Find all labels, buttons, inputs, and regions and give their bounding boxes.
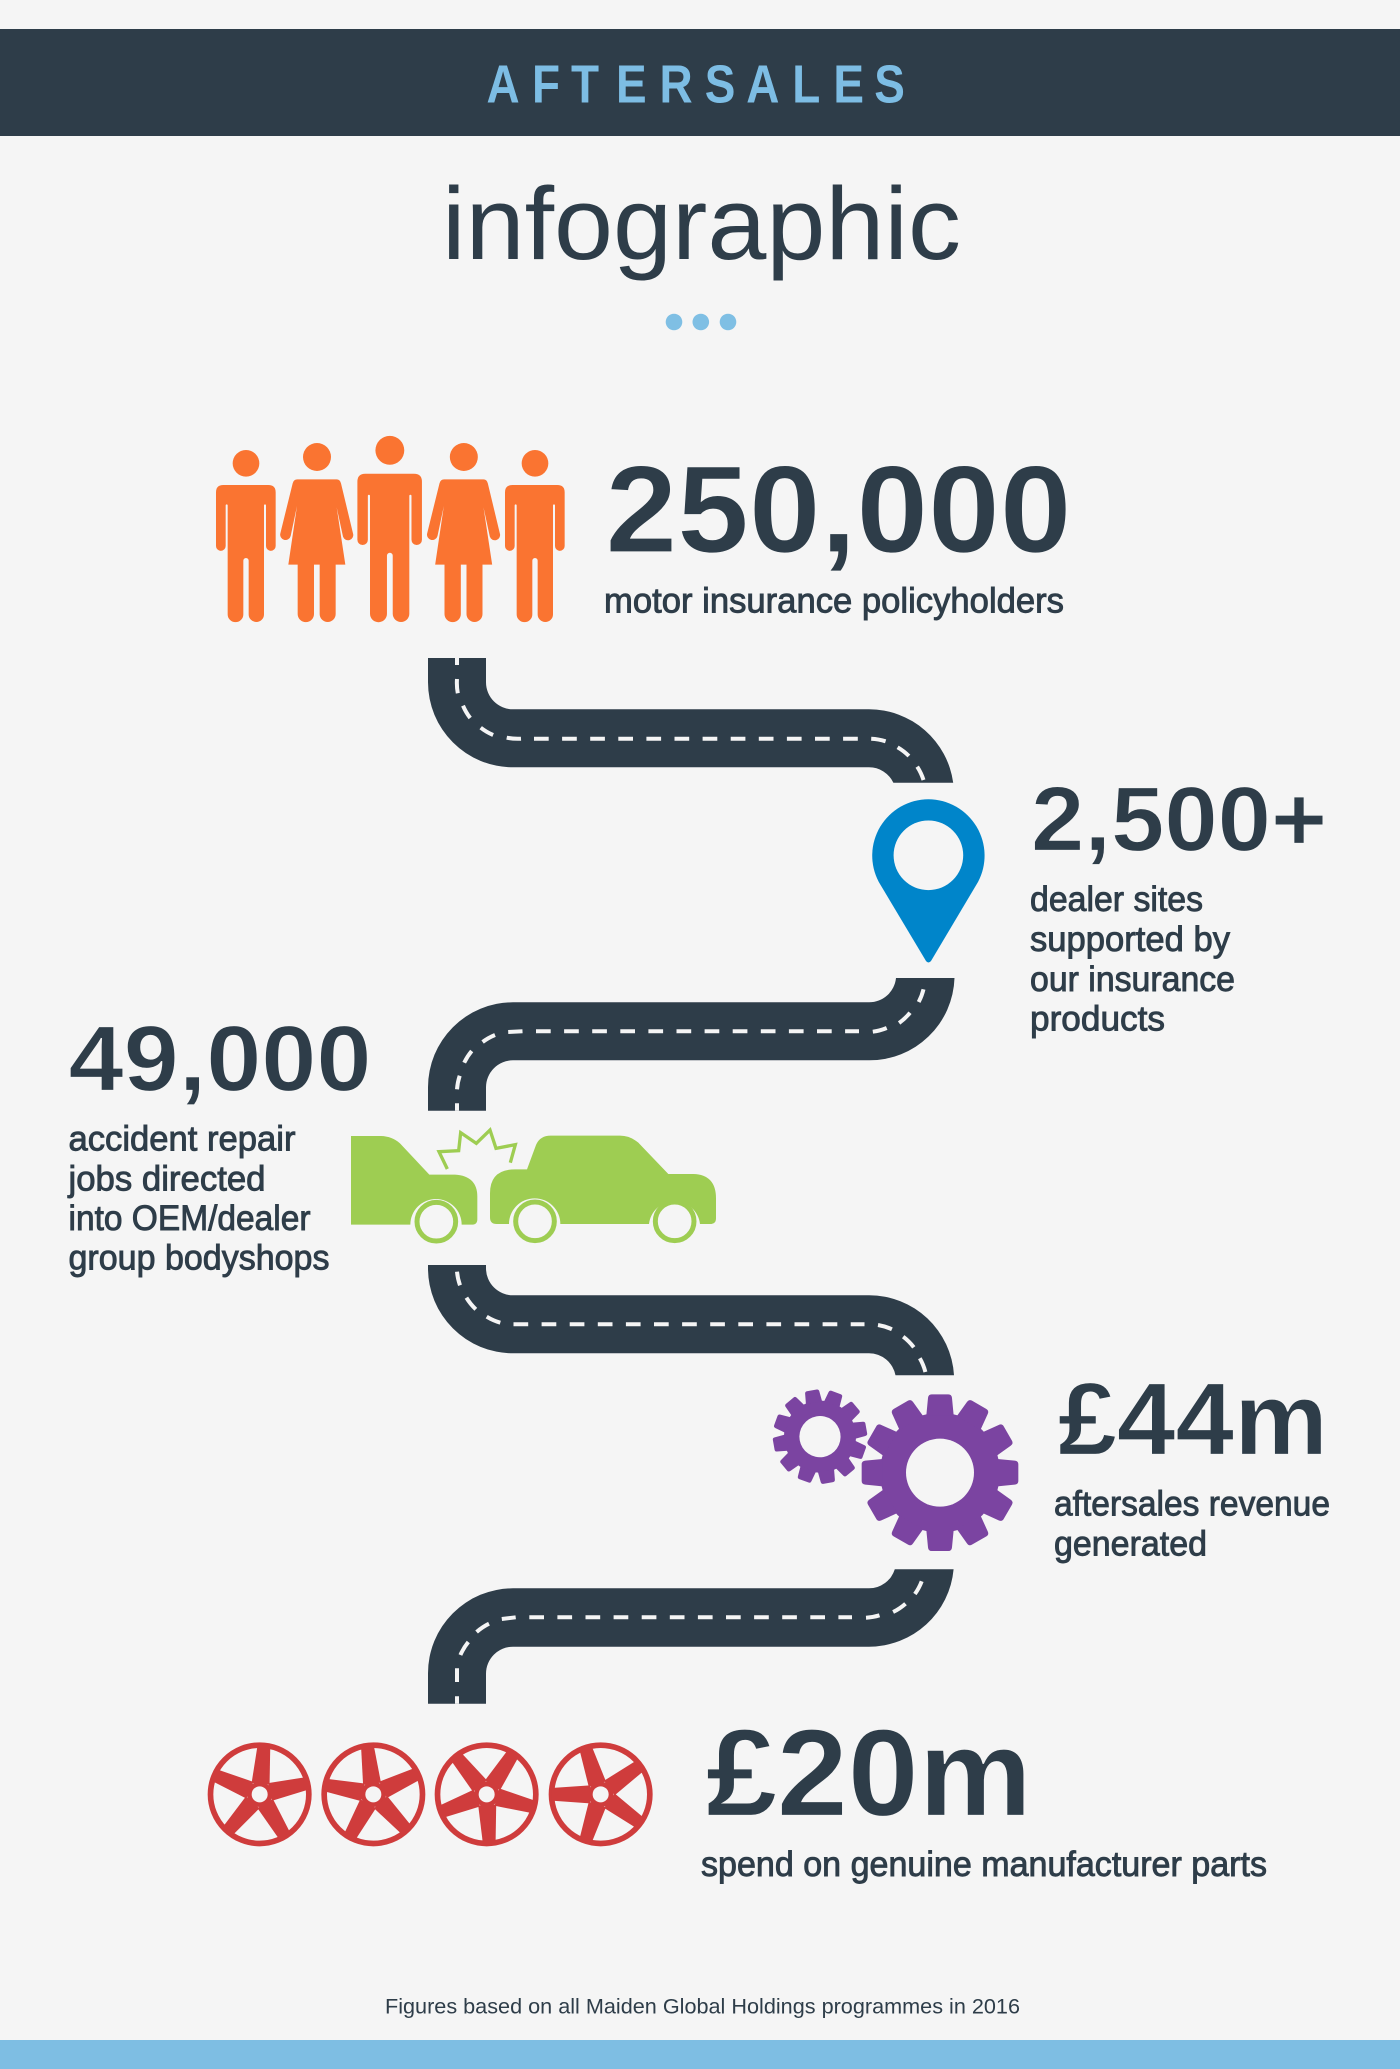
road segment 1 (428, 658, 953, 783)
label: accident repair jobs: group bodyshops (68, 1238, 330, 1277)
label: motor insurance policyholders: motor insurance policyholders (604, 582, 1064, 621)
stat: £44m (1054, 1362, 1330, 1563)
stat: 49,000 (68, 1006, 372, 1277)
label: dealer sites: our insurance (1030, 960, 1235, 999)
road segment 4 (428, 1569, 954, 1704)
icon: car crash (351, 1130, 716, 1241)
label: dealer sites: dealer sites (1030, 880, 1203, 919)
road segment 2 (428, 978, 954, 1111)
label: dealer sites (1030, 880, 1235, 1038)
stat: 49,000: 49,000 (68, 1006, 372, 1110)
stat: 2,500+ (1030, 768, 1327, 1038)
heading: AFTERSALES: AFTERSALES (487, 54, 905, 115)
label: accident repair jobs: accident repair (68, 1119, 296, 1158)
label: dealer sites: supported by (1030, 920, 1230, 959)
footnote: Figures based on all Maiden Global Holdings programmes in 2016 (385, 1996, 1020, 2018)
stat: 250,000: 250,000 (606, 441, 1072, 579)
label: accident repair jobs (68, 1119, 330, 1277)
three dots (666, 314, 736, 330)
stat: £44m: £44m (1058, 1362, 1328, 1477)
label: dealer sites: products (1030, 1000, 1165, 1038)
label: aftersales revenue generated: generated (1054, 1524, 1207, 1563)
label: aftersales revenue generated: aftersales revenue (1054, 1484, 1330, 1523)
label: accident repair jobs: jobs directed (68, 1159, 266, 1198)
label: accident repair jobs: into OEM/dealer (68, 1199, 311, 1238)
icon: gears (766, 1382, 1018, 1551)
stat: 2,500+: 2,500+ (1031, 768, 1327, 870)
icon: alloy wheels (206, 1726, 662, 1859)
icon: map pin (872, 799, 985, 962)
label: spend on genuine manufacturer parts: spend on genuine manufacturer parts (701, 1845, 1267, 1884)
label: aftersales revenue generated (1054, 1484, 1330, 1563)
stat: £20m: £20m (706, 1705, 1032, 1842)
stat: £20m (701, 1705, 1267, 1884)
icon: people (216, 436, 565, 622)
footer bar (0, 2040, 1400, 2069)
title: infographic: infographic (442, 166, 961, 281)
header bar (0, 29, 1400, 136)
road segment 3 (428, 1265, 954, 1375)
